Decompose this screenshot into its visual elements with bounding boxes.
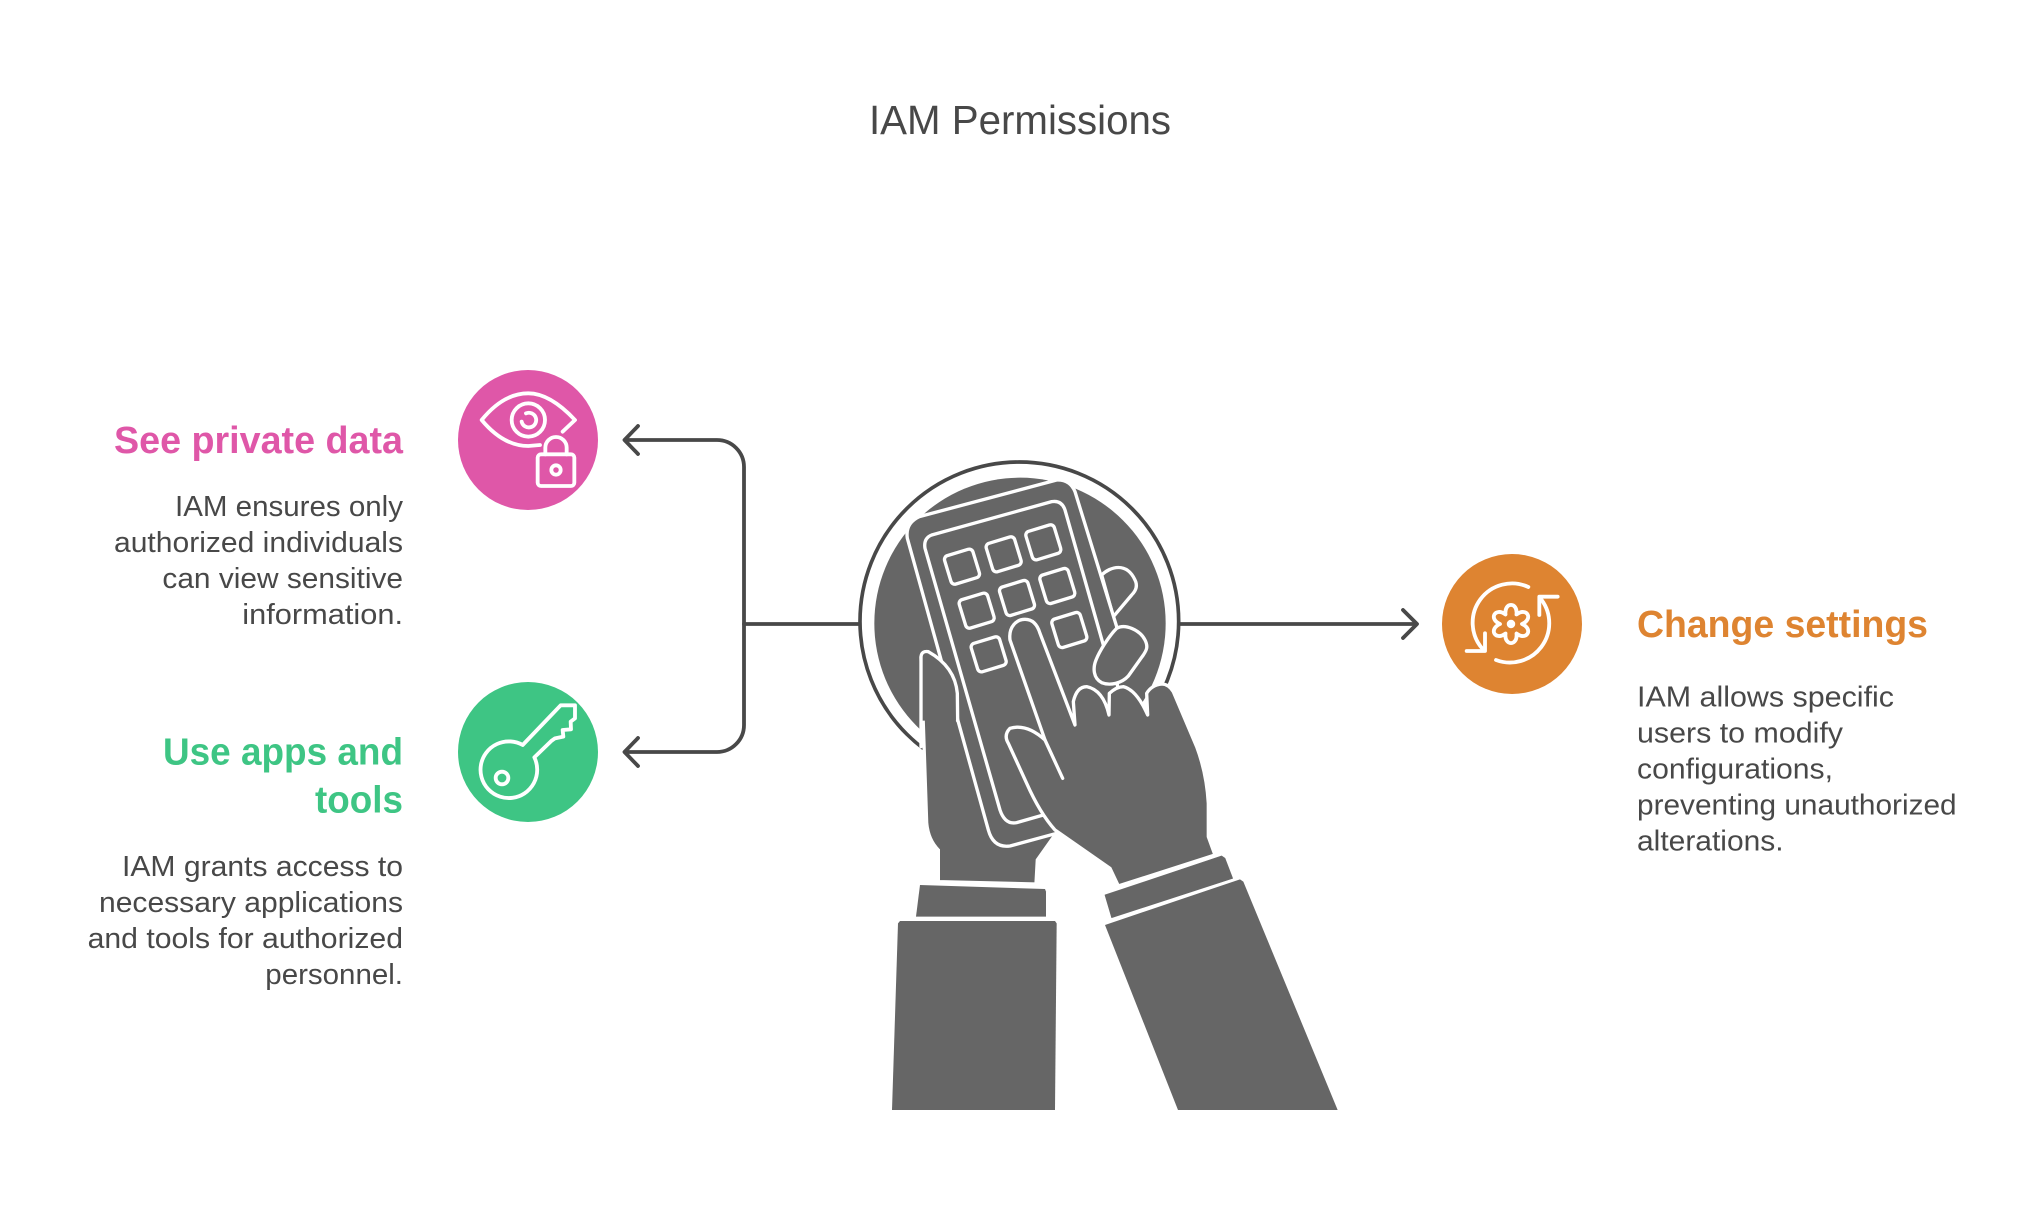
description: change settings: users to modify (1637, 718, 1844, 750)
arrow: centre to change settings (1178, 610, 1417, 638)
keypad screen (925, 501, 1103, 823)
icon: gear with refresh arrows (1442, 554, 1582, 694)
icon: eye and lock (458, 370, 598, 510)
heading: use apps and tools (163, 732, 403, 822)
left palm (921, 657, 1055, 884)
inner disc (874, 478, 1166, 769)
heading: use apps and tools: Use apps and (163, 732, 403, 774)
description: use apps and tools: and tools for authorized (88, 923, 403, 955)
description: change settings: configurations, (1637, 754, 1833, 786)
description: see private data (114, 491, 404, 631)
text block: see private data (114, 420, 404, 631)
central illustration: hands holding keypad (860, 462, 1338, 1110)
description: change settings (1637, 682, 1957, 858)
connector: branches to left items (624, 426, 862, 766)
finger behind keypad (1102, 567, 1136, 617)
heading: see private data: See private data (114, 420, 404, 462)
description: see private data: information. (242, 599, 403, 631)
text block: use apps and tools (88, 732, 403, 991)
heading: change settings: Change settings (1637, 604, 1928, 646)
description: use apps and tools (88, 851, 403, 991)
text block: change settings (1637, 604, 1957, 858)
description: see private data: authorized individuals (114, 527, 403, 559)
outer ring (860, 462, 1179, 781)
description: see private data: can view sensitive (162, 563, 403, 595)
left hand finger over keypad (1094, 627, 1147, 684)
description: use apps and tools: IAM grants access to (122, 851, 403, 883)
description: change settings: IAM allows specific (1637, 682, 1894, 714)
right cuff (1105, 856, 1233, 918)
keypad keys (943, 524, 1088, 673)
left sleeve (892, 921, 1057, 1110)
heading: use apps and tools: tools (315, 780, 403, 822)
description: change settings: alterations. (1637, 826, 1784, 858)
left cuff (916, 885, 1046, 917)
right hand (1006, 619, 1215, 886)
description: see private data: IAM ensures only (175, 491, 404, 523)
right sleeve (1105, 879, 1338, 1110)
title: IAM Permissions (869, 97, 1171, 143)
keypad body (907, 480, 1127, 846)
left thumb (921, 652, 958, 747)
icon: key (458, 682, 598, 822)
description: change settings: preventing unauthorized (1637, 790, 1957, 822)
description: use apps and tools: necessary applications (99, 887, 403, 919)
description: use apps and tools: personnel. (265, 959, 403, 991)
